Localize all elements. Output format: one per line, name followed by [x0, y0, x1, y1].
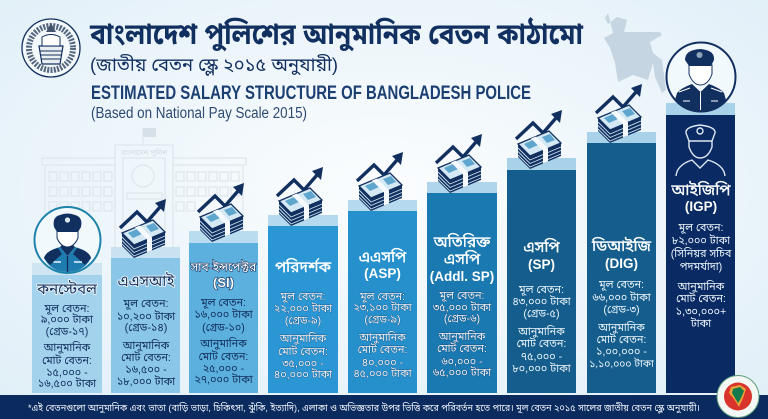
text: constable salary: আনুমানিক	[43, 341, 91, 354]
icon: cash and arrow	[516, 110, 562, 169]
icon: police seal logo	[22, 19, 80, 77]
label: Inspector: পরিদর্শক	[275, 257, 332, 276]
text: DIG salary: ৬৬,০০০ টাকা	[592, 291, 651, 304]
text: SP salary: মূল বেতন:	[518, 284, 564, 296]
icon: cash and arrow	[277, 167, 323, 226]
text: ASP salary: ৪০,০০০ -	[362, 357, 404, 369]
text: SI salary	[194, 297, 253, 386]
label: SI: (SI)	[213, 275, 234, 290]
text: Inspector salary: (গ্রেড-৯)	[285, 315, 321, 327]
label: IGP: (IGP)	[685, 199, 717, 214]
text: SI salary: (গ্রেড-১০)	[202, 322, 245, 334]
text: Additional SP salary: ৬৫,০০০ টাকা	[433, 366, 491, 379]
text: SI salary: মূল বেতন:	[200, 297, 246, 309]
text: IGP salary	[671, 222, 732, 330]
label: SI: সাব-ইন্সপেক্টর	[190, 259, 257, 274]
text: ASP salary: মোট বেতন:	[358, 343, 407, 356]
text: ASP salary	[353, 291, 412, 380]
text: ASP salary: আনুমানিক	[358, 331, 406, 344]
icon: cash and arrow	[198, 183, 244, 242]
text: constable salary: ১৫,০০০ -	[46, 367, 88, 379]
label: ASP	[359, 247, 407, 281]
text: IGP salary: ১,৩০,০০০+	[676, 306, 726, 318]
text: constable salary: (গ্রেড-১৭)	[46, 326, 88, 338]
text: IGP salary: পদমর্যাদা)	[680, 259, 722, 273]
text: ASI salary	[117, 298, 175, 388]
label: Additional SP: এসপি	[444, 249, 481, 268]
icon: cash and arrow	[596, 84, 642, 143]
text: IGP salary: মূল বেতন:	[678, 222, 723, 234]
text: SI salary: মোট বেতন:	[199, 350, 248, 363]
text: DIG salary: মোট বেতন:	[597, 333, 646, 346]
label: SP	[523, 237, 561, 272]
text: SI salary: আনুমানিক	[199, 337, 247, 350]
text: IGP salary: (সিনিয়র সচিব	[671, 247, 732, 260]
text: SP salary: মোট বেতন:	[517, 337, 566, 350]
icon: government emblem	[717, 376, 759, 418]
footnote: *এই বেতনগুলো আনুমানিক এবং ভাতা (বাড়ি ভাড়া, চিকিৎসা, ঝুঁকি, ইত্যাদি), এলাকা ও অভিজ্ঞতার উপর ভিত্তি করে পরিবর্তন হতে পারে। মূল বেতন ২০১৫ সালের জাতীয় বেতন স্কেল অনুযায়ী।	[28, 402, 700, 414]
building illustration: বাংলাদেশ পুলিশ	[120, 149, 167, 157]
text: Inspector salary: ২২,০০০ টাকা	[274, 302, 332, 315]
icon: IGP avatar	[666, 42, 736, 112]
text: Additional SP salary: মূল বেতন:	[439, 290, 484, 302]
text: ASI salary: ১৮,০০০ টাকা	[117, 375, 175, 388]
building illustration	[42, 128, 246, 262]
text: SP salary	[512, 284, 571, 375]
icon: Bangladesh map silhouette	[604, 13, 666, 93]
icon: constable avatar	[34, 207, 100, 273]
text: ASP salary: ২৩,১০০ টাকা	[353, 301, 412, 314]
text: ASI salary: ১০,২০০ টাকা	[117, 310, 175, 323]
bar: Additional SP	[427, 134, 497, 393]
text: DIG salary: আনুমানিক	[597, 321, 645, 334]
text: DIG salary: মূল বেতন:	[598, 279, 644, 291]
text: DIG salary: ১,০০,০০০ -	[596, 346, 647, 358]
text: Additional SP salary: ৩৫,০০০ টাকা	[433, 301, 491, 314]
text: ASP salary: (গ্রেড-৯)	[364, 314, 401, 326]
label: DIG: ডিআইজি	[591, 236, 652, 255]
label: ASP: এএসপি	[359, 247, 407, 266]
text: SI salary: ১৬,০০০ টাকা	[194, 308, 253, 321]
icon: cash and arrow	[120, 199, 166, 258]
subtitle: English: (Based on National Pay Scale 2015)	[91, 105, 307, 122]
text: ASI salary: আনুমানিক	[122, 339, 170, 352]
icon: cash and arrow	[357, 152, 403, 211]
text: IGP salary: মোট বেতন:	[676, 292, 726, 305]
subtitle: Bengali: (জাতীয় বেতন স্কেল ২০১৫ অনুযায়ী)	[90, 53, 338, 77]
text: SP salary: আনুমানিক	[517, 325, 565, 338]
text: constable salary: মূল বেতন:	[44, 303, 89, 315]
text: SP salary: (গ্রেড-৫)	[523, 308, 560, 320]
label: ASP: (ASP)	[364, 266, 401, 281]
bar: Constable	[32, 207, 102, 393]
bar: Inspector	[268, 167, 338, 393]
title: English: ESTIMATED SALARY STRUCTURE OF BANGLADESH POLICE	[91, 83, 531, 104]
text: ASI salary: মূল বেতন:	[123, 298, 168, 310]
text: ASP salary: মূল বেতন:	[359, 291, 405, 303]
text: SI salary: ২৫,০০০ -	[203, 363, 245, 375]
icon: cash and arrow	[436, 134, 482, 193]
text: DIG salary	[589, 279, 654, 370]
text: Inspector salary	[274, 291, 332, 381]
bar: SI	[189, 183, 258, 393]
text: Inspector salary: মোট বেতন:	[278, 345, 328, 358]
bar: SP	[507, 110, 576, 393]
text: IGP salary: টাকা	[690, 317, 711, 330]
label: SP: এসপি	[523, 237, 561, 256]
text: SP salary: ৮০,০০০ টাকা	[512, 362, 571, 375]
label: constable: কনস্টেবল	[36, 281, 98, 298]
label: SI	[190, 259, 257, 290]
text: DIG salary: ১,১০,০০০ টাকা	[589, 357, 654, 370]
icon: officer outline	[676, 125, 725, 176]
label: SP: (SP)	[528, 257, 555, 272]
text: Additional SP salary: (গ্রেড-৬)	[444, 313, 480, 325]
text: Inspector salary: মূল বেতন:	[280, 291, 325, 303]
title: Bengali: বাংলাদেশ পুলিশের আনুমানিক বেতন কাঠামো	[89, 17, 584, 52]
bar: ASP	[348, 152, 417, 393]
text: constable salary: মোট বেতন:	[42, 354, 92, 367]
label: DIG: (DIG)	[605, 256, 638, 271]
text: ASI salary: (গ্রেড-১৪)	[125, 322, 167, 334]
text: DIG salary: (গ্রেড-৩)	[603, 304, 640, 316]
label: IGP	[671, 180, 731, 214]
text: constable salary: ১৬,৫০০ টাকা	[38, 377, 96, 390]
label: DIG	[591, 236, 652, 271]
bar: DIG	[587, 84, 656, 393]
label: Additional SP: অতিরিক্ত	[433, 232, 491, 251]
text: constable salary	[38, 303, 96, 390]
text: constable salary: ৯,০০০ টাকা	[41, 313, 93, 326]
label: Additional SP: (Addl. SP)	[430, 269, 494, 284]
text: Additional SP salary: মোট বেতন:	[437, 342, 487, 355]
label: Additional SP	[430, 232, 494, 284]
text: Inspector salary: ৪০,০০০ টাকা	[274, 368, 332, 381]
label: IGP: আইজিপি	[671, 180, 731, 199]
text: ASP salary: ৪৫,০০০ টাকা	[353, 367, 412, 380]
text: ASI salary: মোট বেতন:	[121, 351, 171, 364]
text: Additional SP salary	[433, 290, 491, 379]
text: ASI salary: ১৬,৫০০ -	[125, 364, 167, 376]
text: IGP salary: আনুমানিক	[677, 280, 725, 293]
text: SI salary: ২৭,০০০ টাকা	[194, 373, 253, 386]
text: SP salary: ৪৩,০০০ টাকা	[512, 295, 571, 308]
bar: IGP	[666, 42, 736, 393]
label: ASI: এএসআই	[118, 273, 175, 290]
text: IGP salary: ৮২,০০০ টাকা	[672, 234, 730, 247]
text: Inspector salary: ৩৫,০০০ -	[282, 358, 324, 370]
text: Inspector salary: আনুমানিক	[279, 332, 327, 345]
text: Additional SP salary: আনুমানিক	[438, 330, 486, 343]
text: Additional SP salary: ৬০,০০০ -	[441, 356, 483, 368]
footer band	[0, 395, 768, 419]
text: SP salary: ৭৫,০০০ -	[521, 351, 563, 363]
bar: ASI	[111, 199, 180, 393]
